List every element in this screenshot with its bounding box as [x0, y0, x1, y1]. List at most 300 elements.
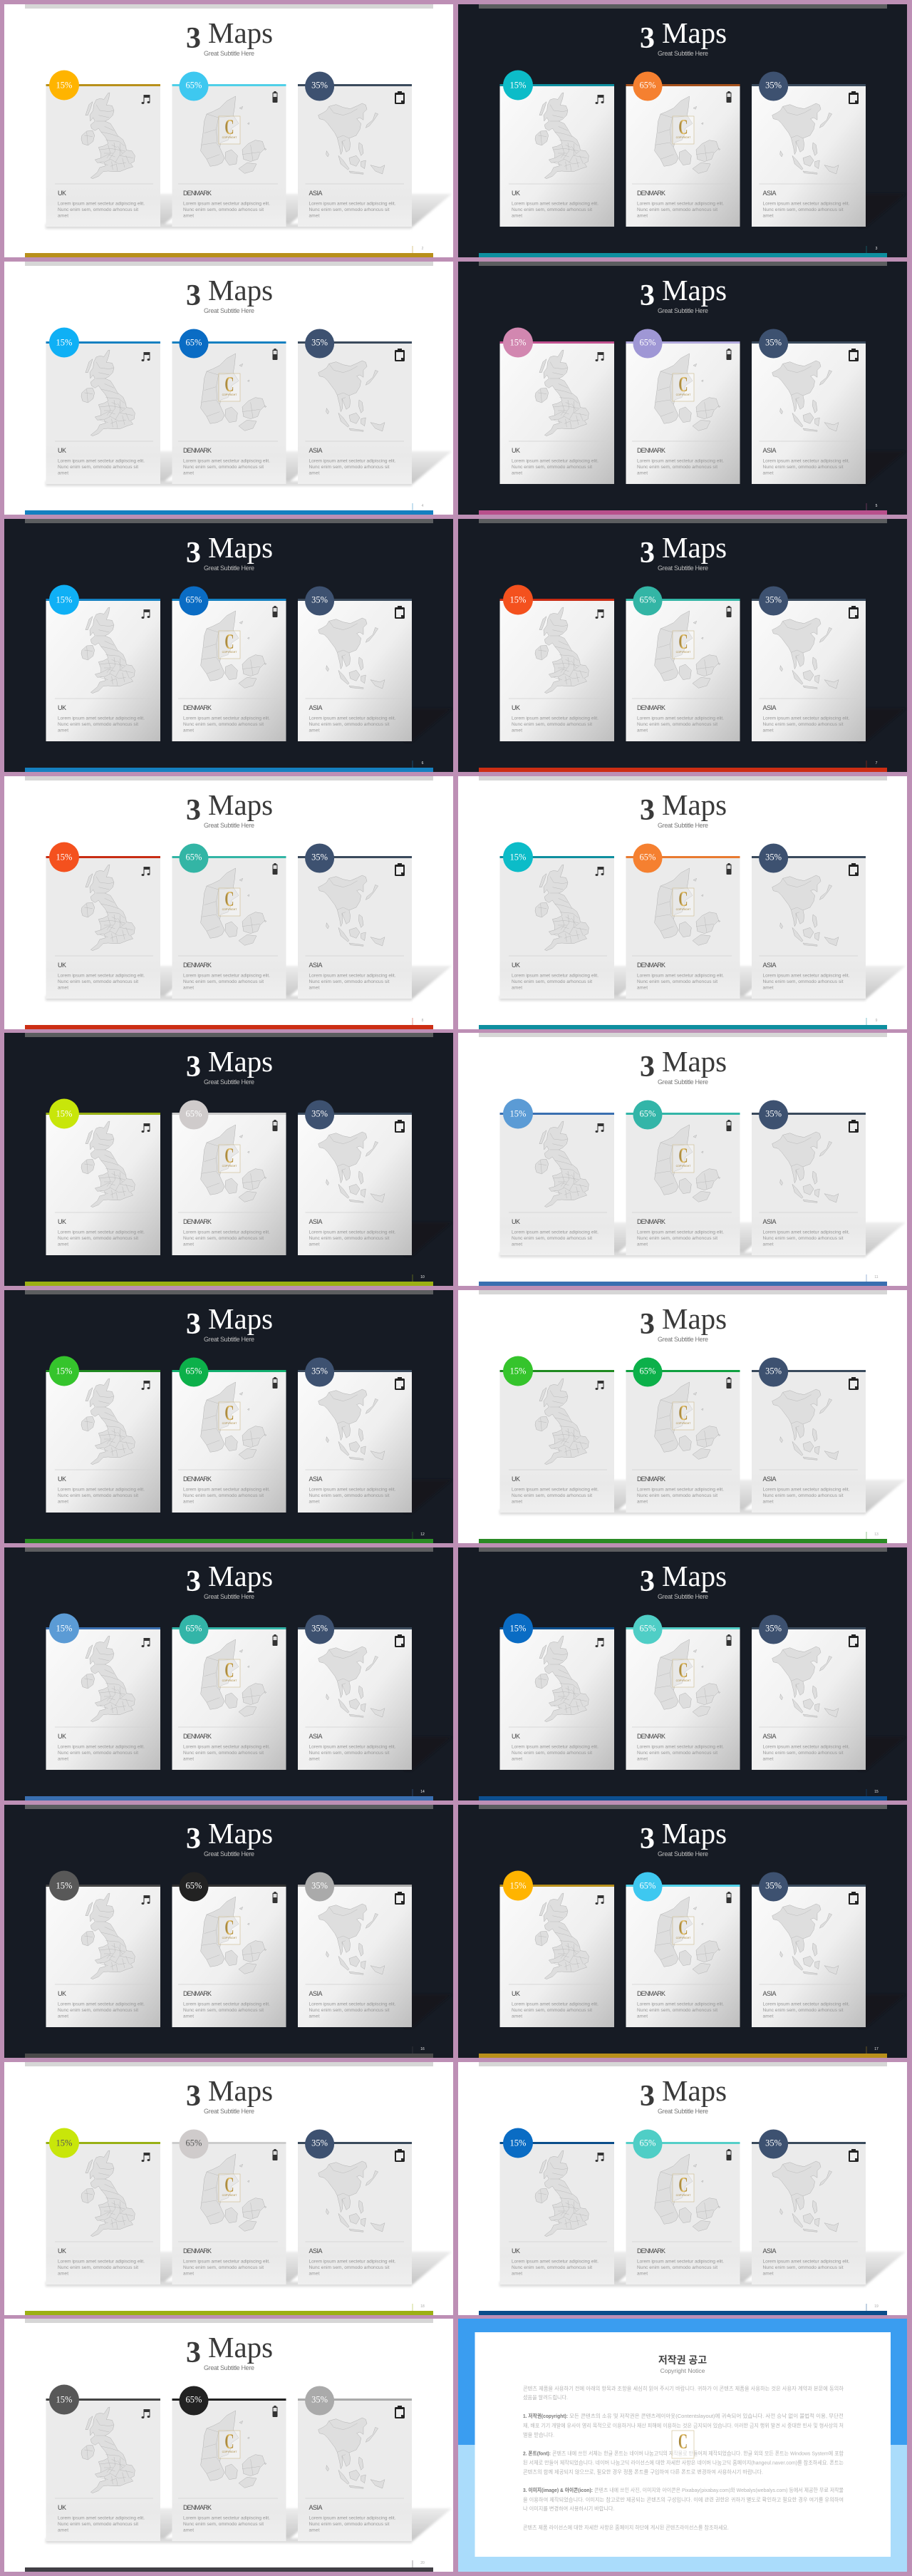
title: Maps — [208, 16, 273, 49]
icon: clipboard — [395, 1634, 405, 1647]
description: Nunc enim sem, ommodo arhoncus sit — [183, 1751, 264, 1756]
map: Denmark — [201, 1897, 266, 1974]
panel: copyright notice — [458, 2319, 907, 2572]
watermark: C — [678, 2428, 688, 2453]
page number — [866, 2304, 879, 2311]
badge: 35% — [311, 2395, 328, 2405]
description: Nunc enim sem, ommodo arhoncus sit — [637, 465, 717, 470]
slide 3 — [458, 4, 907, 257]
description: amet — [183, 1242, 194, 1247]
description: amet — [512, 1500, 522, 1504]
description: amet — [637, 2014, 648, 2019]
card: UK — [46, 2128, 160, 2284]
badge: 35% — [311, 1109, 328, 1119]
closing note: 콘텐츠 제품 라이선스에 대한 자세한 사항은 홈페이지 하단에 게시된 콘텐츠라이선스를 참조하세요. — [523, 2523, 729, 2530]
badge — [305, 2386, 334, 2415]
description — [183, 1487, 270, 1504]
page number: 5 — [876, 504, 878, 508]
icon: clipboard — [849, 91, 859, 104]
badge: 15% — [56, 1109, 72, 1119]
badge: 15% — [56, 594, 72, 604]
subtitle: Great Subtitle Here — [204, 307, 254, 314]
description: amet — [58, 2014, 68, 2019]
map: Asia — [318, 1132, 385, 1202]
title — [640, 1817, 727, 1855]
section 2: 된 서체로 만들어 제작되었습니다. 네이버 나눔고딕 라이선스에 대한 자세한 사항은 네이버 나눔고딕 홈페이지(hangeul.naver.com)를 참조하세요. 폰트는 — [523, 2459, 844, 2466]
description: amet — [309, 2271, 320, 2277]
badge: 35% — [765, 1366, 782, 1376]
description — [512, 974, 598, 991]
badge: 65% — [186, 2395, 202, 2405]
accent line — [298, 1885, 412, 1887]
section 2: 콘텐츠의 함께 제공되지 않으므로, 필요한 경우 정품 폰트를 구입하여 다른 폰트로 변경하여 사용하시기 바랍니다. — [523, 2468, 763, 2475]
accent line — [298, 1627, 412, 1629]
subtitle: Great Subtitle Here — [204, 2108, 254, 2115]
name: DENMARK — [183, 962, 212, 969]
icon: battery — [272, 91, 278, 103]
badge: 35% — [765, 1624, 782, 1634]
accent line — [752, 1370, 866, 1372]
name: DENMARK — [183, 704, 212, 711]
title: Maps — [208, 1045, 273, 1078]
name: ASIA — [762, 2247, 777, 2255]
name: UK — [512, 1990, 520, 1997]
title: 3 — [640, 1565, 655, 1598]
description — [637, 459, 724, 476]
description — [58, 1230, 145, 1247]
title — [186, 531, 273, 570]
description — [762, 201, 850, 218]
badge — [503, 70, 533, 100]
heading: 저작권 공고 — [658, 2354, 707, 2366]
watermark — [219, 2172, 240, 2202]
icon: battery — [272, 1377, 278, 1389]
card: Denmark — [626, 329, 740, 484]
name: DENMARK — [637, 190, 665, 197]
title: Maps — [208, 1560, 273, 1592]
subheading: Copyright Notice — [660, 2367, 705, 2374]
description: Nunc enim sem, ommodo arhoncus sit — [309, 1751, 390, 1756]
badge — [759, 844, 788, 872]
icon: clipboard — [395, 863, 405, 876]
map: Denmark — [201, 611, 266, 688]
accent line — [172, 1627, 286, 1629]
title: Maps — [208, 1302, 273, 1335]
name: UK — [58, 190, 66, 197]
page number — [413, 1532, 425, 1539]
icon: battery — [272, 863, 278, 875]
description: Lorem ipsum amet sectetur adipiscing elit. — [309, 974, 396, 978]
page number — [866, 1274, 879, 1282]
description: amet — [58, 1756, 68, 1762]
description: Lorem ipsum amet sectetur adipiscing elit. — [58, 1487, 145, 1493]
title — [640, 274, 727, 312]
map: Denmark — [201, 96, 266, 173]
description — [58, 2516, 145, 2533]
icon: battery — [272, 349, 278, 360]
card: Asia — [752, 329, 866, 484]
badge — [633, 586, 663, 616]
background — [458, 519, 907, 772]
badge — [180, 586, 208, 616]
badge: 65% — [640, 852, 656, 862]
badge: 65% — [640, 1624, 656, 1634]
description: Nunc enim sem, ommodo arhoncus sit — [637, 207, 717, 212]
description: amet — [58, 1500, 68, 1504]
map: Denmark — [201, 354, 266, 431]
watermark — [673, 1143, 694, 1173]
bottom bar — [479, 2311, 887, 2315]
card: Denmark — [626, 71, 740, 227]
map: Asia — [318, 1647, 385, 1717]
name: ASIA — [762, 1218, 777, 1225]
badge — [503, 2128, 533, 2158]
description — [183, 459, 270, 476]
slide 6 — [4, 519, 453, 772]
title: 3 — [640, 22, 655, 55]
description: Nunc enim sem, ommodo arhoncus sit — [762, 722, 844, 727]
map: UK — [535, 1379, 589, 1465]
watermark — [219, 1400, 240, 1430]
description: Lorem ipsum amet sectetur adipiscing elit. — [58, 716, 145, 721]
badge — [180, 1872, 208, 1902]
description: Nunc enim sem, ommodo arhoncus sit — [512, 1751, 592, 1756]
name: ASIA — [309, 447, 322, 454]
subtitle: Great Subtitle Here — [204, 1078, 254, 1086]
section 3: 콘텐츠 내에 쓰인 사진, 이미지와 아이콘은 Pixabay(pixabay.com)와 Webalys(webalys.com) 등에서 제공한 무료 저작물 — [594, 2486, 844, 2493]
description: Nunc enim sem, ommodo arhoncus sit — [512, 465, 592, 470]
description: amet — [58, 985, 68, 991]
description: amet — [637, 985, 648, 991]
name: ASIA — [762, 704, 777, 711]
badge — [49, 843, 79, 872]
description: Nunc enim sem, ommodo arhoncus sit — [58, 1751, 138, 1756]
description: Nunc enim sem, ommodo arhoncus sit — [637, 979, 717, 984]
watermark — [673, 1657, 694, 1687]
description: Nunc enim sem, ommodo arhoncus sit — [512, 1236, 592, 1241]
description — [762, 2001, 850, 2019]
description: amet — [637, 728, 648, 733]
description: amet — [58, 2528, 68, 2533]
card: UK — [500, 584, 614, 741]
accent line — [626, 2142, 740, 2144]
subtitle: Great Subtitle Here — [204, 1850, 254, 1858]
icon: music — [141, 1381, 150, 1390]
page number: 20 — [420, 2561, 425, 2565]
accent line — [46, 2142, 160, 2144]
card: UK — [500, 1356, 614, 1513]
name: ASIA — [762, 447, 777, 454]
map: Asia — [772, 1904, 839, 1974]
title: 3 — [186, 22, 201, 55]
description: amet — [183, 1500, 194, 1504]
card: UK — [500, 328, 614, 484]
badge: 15% — [56, 1624, 72, 1634]
name: UK — [58, 1218, 66, 1225]
icon: music — [596, 2153, 604, 2162]
badge: 15% — [510, 1624, 526, 1634]
badge — [503, 843, 533, 872]
description: amet — [183, 985, 194, 991]
description: Nunc enim sem, ommodo arhoncus sit — [309, 1236, 390, 1241]
badge — [49, 328, 79, 358]
map: UK — [81, 93, 135, 179]
badge — [180, 329, 208, 358]
description — [58, 201, 145, 218]
subtitle: Great Subtitle Here — [204, 1593, 254, 1600]
name: ASIA — [309, 190, 322, 197]
description: Lorem ipsum amet sectetur adipiscing elit. — [762, 1745, 850, 1749]
description: Nunc enim sem, ommodo arhoncus sit — [58, 2008, 138, 2013]
accent line — [752, 856, 866, 858]
description — [309, 1487, 396, 1504]
badge — [305, 2130, 334, 2158]
card: Asia — [752, 844, 866, 999]
icon: clipboard — [849, 1892, 859, 1905]
section 3: 을 이용하여 제작되었습니다. 이미지는 참고로만 제공되는 콘텐츠의 구성입니다. 이에 관련 권한은 귀하가 별도로 확인하고 필요한 경우 여기를 유의하여 — [523, 2496, 844, 2503]
description: amet — [309, 985, 320, 991]
icon: music — [141, 2153, 150, 2162]
bottom bar — [479, 2054, 887, 2058]
page number: 6 — [422, 761, 424, 766]
accent line — [172, 2142, 286, 2144]
description: amet — [512, 1756, 522, 1762]
name: UK — [512, 1475, 520, 1483]
icon: music — [596, 1895, 604, 1905]
name: UK — [512, 1733, 520, 1740]
bottom bar — [479, 1025, 887, 1029]
title: Maps — [662, 1302, 727, 1335]
card: Asia — [752, 586, 866, 741]
title — [186, 274, 273, 312]
accent line — [626, 341, 740, 344]
description — [58, 1487, 145, 1504]
page number: 19 — [874, 2304, 879, 2309]
map: UK — [535, 350, 589, 436]
description: Lorem ipsum amet sectetur adipiscing elit. — [512, 2260, 598, 2264]
name: ASIA — [762, 962, 777, 969]
map: Denmark — [201, 2154, 266, 2231]
card: Asia — [298, 1101, 412, 1255]
map: Asia — [318, 1904, 385, 1974]
badge: 65% — [186, 80, 202, 90]
badge: 15% — [510, 2138, 526, 2148]
accent line — [172, 341, 286, 344]
accent line — [626, 856, 740, 858]
map: Asia — [772, 618, 839, 689]
description: amet — [183, 2014, 194, 2019]
badge — [503, 1356, 533, 1386]
description: amet — [637, 470, 648, 476]
description: amet — [309, 214, 320, 218]
title — [640, 2074, 727, 2113]
map: Denmark — [201, 1382, 266, 1459]
badge: 15% — [56, 852, 72, 862]
name: ASIA — [762, 1475, 777, 1483]
description: Lorem ipsum amet sectetur adipiscing elit. — [637, 201, 724, 207]
page number — [866, 246, 878, 253]
badge — [305, 1615, 334, 1644]
accent line — [46, 1885, 160, 1887]
card: UK — [46, 1614, 160, 1770]
card: UK — [46, 1356, 160, 1513]
slide 5 — [458, 262, 907, 515]
name: UK — [58, 1990, 66, 1997]
name: DENMARK — [183, 2504, 212, 2511]
badge: 65% — [186, 594, 202, 604]
description: Lorem ipsum amet sectetur adipiscing elit. — [637, 1745, 724, 1749]
icon: battery — [727, 1377, 731, 1389]
description — [637, 2001, 724, 2019]
name: UK — [58, 2504, 66, 2511]
description: Lorem ipsum amet sectetur adipiscing elit. — [637, 2001, 724, 2007]
title: Maps — [208, 2331, 273, 2364]
description: Lorem ipsum amet sectetur adipiscing elit. — [183, 974, 270, 978]
card: Asia — [752, 1615, 866, 1770]
page number: 11 — [874, 1275, 879, 1279]
description: Lorem ipsum amet sectetur adipiscing elit. — [309, 201, 396, 207]
description: Nunc enim sem, ommodo arhoncus sit — [512, 2265, 592, 2270]
badge — [180, 1615, 208, 1644]
badge — [180, 1101, 208, 1129]
badge — [180, 2386, 208, 2415]
icon: music — [141, 609, 150, 619]
bottom bar — [25, 2311, 433, 2315]
badge: 65% — [186, 1880, 202, 1890]
badge: 65% — [186, 1366, 202, 1376]
description: amet — [637, 214, 648, 218]
card: Asia — [298, 2386, 412, 2541]
description — [183, 2260, 270, 2277]
title — [640, 1045, 727, 1083]
name: ASIA — [309, 1218, 322, 1225]
title: 3 — [186, 2337, 201, 2369]
description: amet — [183, 1756, 194, 1762]
description — [637, 201, 724, 218]
accent line — [46, 2399, 160, 2401]
icon: battery — [272, 1892, 278, 1903]
subtitle: Great Subtitle Here — [658, 307, 708, 314]
bottom bar — [479, 510, 887, 515]
watermark — [673, 2172, 694, 2202]
description — [762, 459, 850, 476]
badge — [759, 2130, 788, 2158]
description: Lorem ipsum amet sectetur adipiscing elit. — [762, 1230, 850, 1235]
bottom bar — [25, 2567, 433, 2572]
map: UK — [81, 1379, 135, 1465]
icon: battery — [727, 2149, 731, 2160]
section 3 — [523, 2486, 844, 2512]
background — [4, 2062, 453, 2315]
name: ASIA — [309, 1733, 322, 1740]
description — [637, 974, 724, 991]
subtitle: Great Subtitle Here — [658, 2108, 708, 2115]
badge: 35% — [765, 338, 782, 348]
description: amet — [309, 1500, 320, 1504]
badge — [305, 1872, 334, 1902]
description: Lorem ipsum amet sectetur adipiscing elit. — [183, 459, 270, 463]
description: Nunc enim sem, ommodo arhoncus sit — [183, 1236, 264, 1241]
card: Asia — [298, 586, 412, 741]
accent line — [626, 84, 740, 86]
description — [183, 2516, 270, 2533]
description — [58, 459, 145, 476]
name: UK — [58, 2247, 66, 2255]
description: Nunc enim sem, ommodo arhoncus sit — [762, 207, 844, 212]
badge: 35% — [765, 594, 782, 604]
intro: 셨음을 알려드립니다. — [523, 2394, 568, 2401]
name: ASIA — [762, 1990, 777, 1997]
description — [58, 1745, 145, 1762]
subtitle: Great Subtitle Here — [204, 1336, 254, 1343]
map: Denmark — [201, 1639, 266, 1716]
accent line — [626, 599, 740, 601]
name: ASIA — [309, 2247, 322, 2255]
map: UK — [535, 2150, 589, 2237]
card: UK — [500, 1099, 614, 1255]
card: Denmark — [626, 1101, 740, 1255]
watermark — [673, 114, 694, 144]
page number — [413, 2046, 425, 2054]
badge — [49, 1356, 79, 1386]
badge — [503, 1099, 533, 1129]
name: ASIA — [762, 1733, 777, 1740]
icon: music — [596, 1123, 604, 1133]
map: Asia — [318, 361, 385, 431]
icon: music — [141, 1895, 150, 1905]
description: Lorem ipsum amet sectetur adipiscing elit. — [58, 1230, 145, 1235]
badge: 65% — [640, 594, 656, 604]
badge: 65% — [186, 338, 202, 348]
description: Lorem ipsum amet sectetur adipiscing elit. — [512, 1745, 598, 1749]
title — [186, 16, 273, 55]
name: UK — [512, 447, 520, 454]
background — [4, 519, 453, 772]
map: UK — [81, 1121, 135, 1207]
accent line — [500, 1627, 614, 1629]
badge: 65% — [640, 1880, 656, 1890]
map: UK — [535, 93, 589, 179]
description: Lorem ipsum amet sectetur adipiscing elit. — [309, 459, 396, 463]
name: DENMARK — [183, 1733, 212, 1740]
name: DENMARK — [637, 704, 665, 711]
watermark — [673, 1400, 694, 1430]
subtitle: Great Subtitle Here — [658, 822, 708, 829]
title: 3 — [640, 537, 655, 570]
icon: music — [596, 867, 604, 876]
icon: music — [596, 1638, 604, 1647]
description: amet — [762, 2014, 774, 2019]
map: Denmark — [655, 1125, 720, 1202]
description: Nunc enim sem, ommodo arhoncus sit — [309, 1493, 390, 1498]
map: Asia — [318, 618, 385, 689]
badge: 15% — [510, 338, 526, 348]
background — [4, 2319, 453, 2572]
title — [640, 1302, 727, 1341]
title — [186, 1302, 273, 1341]
description: amet — [637, 1500, 648, 1504]
description: Nunc enim sem, ommodo arhoncus sit — [512, 2008, 592, 2013]
accent line — [626, 1627, 740, 1629]
description: Nunc enim sem, ommodo arhoncus sit — [309, 979, 390, 984]
description — [58, 716, 145, 733]
card: Denmark — [172, 1872, 286, 2027]
map: Denmark — [655, 354, 720, 431]
description: Lorem ipsum amet sectetur adipiscing elit. — [637, 716, 724, 721]
title: 3 — [186, 1823, 201, 1855]
description — [512, 2001, 598, 2019]
badge — [49, 1099, 79, 1129]
